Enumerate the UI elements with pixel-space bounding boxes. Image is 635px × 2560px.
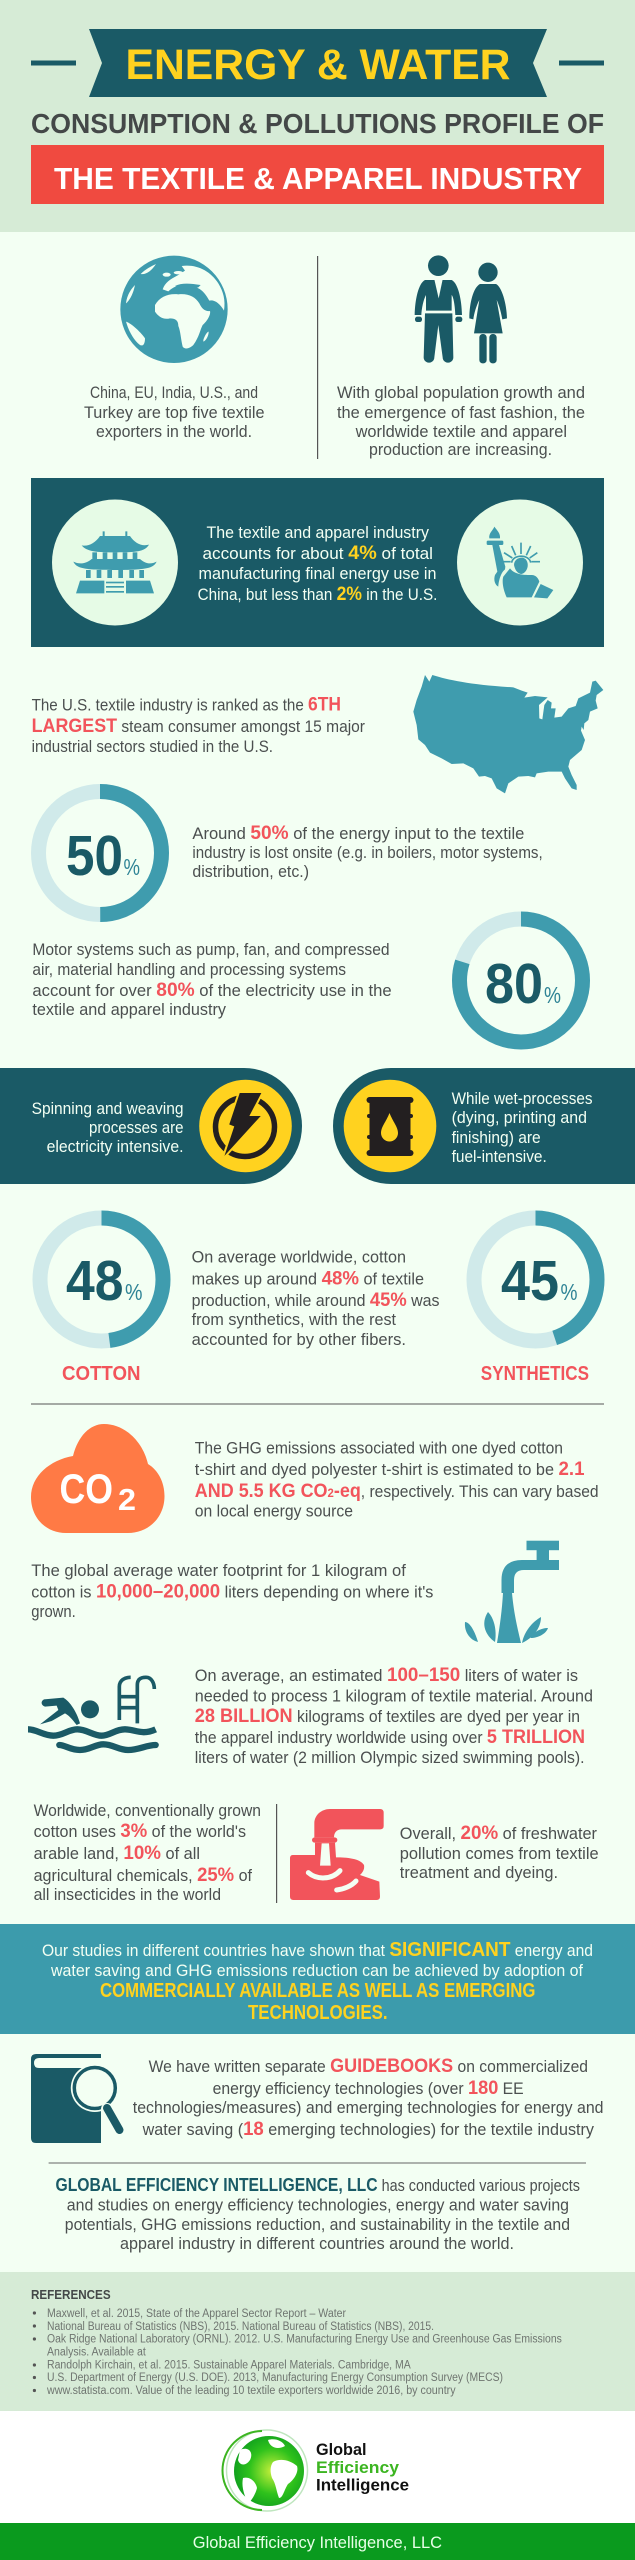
panel: 80 percent motor systems xyxy=(32,919,582,1042)
text: exporters: China, EU, India, U.S., and xyxy=(90,384,258,402)
text: 6th largest: LARGEST steam consumer amongst 15 major xyxy=(32,716,365,737)
footer xyxy=(0,2523,635,2560)
list of references: U.S. Department of Energy (U.S. DOE). 2013, Manufacturing Energy Consumption Survey (MECS) xyxy=(47,2372,503,2384)
text: wet processes: finishing) are xyxy=(452,1129,541,1147)
text: fast fashion: production are increasing. xyxy=(369,441,552,459)
text: guidebooks xyxy=(133,2056,604,2140)
icon: CO2 cloud xyxy=(31,1424,164,1533)
chart: 45% synthetics ring xyxy=(474,1218,597,1385)
text: 50%: industry is lost onsite (e.g. in boilers, motor systems, xyxy=(192,844,543,862)
heading: references: REFERENCES xyxy=(31,2287,111,2302)
icon: globe xyxy=(120,256,228,363)
text: 80%: account for over 80% of the electricity use in the xyxy=(32,980,392,1001)
text: cotton land use: agricultural chemicals, 25% of xyxy=(34,1865,252,1886)
subtitle: CONSUMPTION & POLLUTIONS PROFILE OF xyxy=(31,108,604,139)
list of references: Randolph Kirchain, et al. 2015. Sustainable Apparel Materials. Cambridge, MA xyxy=(47,2360,411,2372)
panel: top exporters xyxy=(84,255,585,459)
text: exporters xyxy=(84,384,264,441)
list of references: Oak Ridge National Laboratory (ORNL). 2012. U.S. Manufacturing Energy Use and Greenhouse Gas Emissions xyxy=(47,2334,562,2346)
panel: cotton and synthetics xyxy=(40,1218,597,1385)
text: guidebooks: We have written separate GUIDEBOOKS on commercialized xyxy=(149,2056,588,2077)
text: fiber shares xyxy=(192,1249,440,1349)
panel: China and U.S. energy share xyxy=(31,478,604,647)
text: dyeing water: 28 BILLION kilograms of textiles are dyed per year in xyxy=(195,1706,580,1727)
red title banner xyxy=(31,145,604,204)
title ribbon xyxy=(31,29,604,97)
text: 4% and 2% xyxy=(198,524,437,605)
icon: statue of liberty xyxy=(457,500,583,626)
panel: U.S. steam consumer xyxy=(32,675,603,793)
text: GHG: on local energy source xyxy=(195,1503,353,1521)
text: spinning and weaving: processes are xyxy=(89,1119,184,1137)
text: dyeing water: the apparel industry worldwide using over 5 TRILLION xyxy=(195,1727,585,1748)
text: cotton land use: Worldwide, conventionally grown xyxy=(34,1802,261,1820)
icon: CO2 cloud: 2 xyxy=(118,1482,136,1517)
panel: water footprint xyxy=(31,1541,559,1643)
text: exporters: Turkey are top five textile xyxy=(84,404,264,422)
text: company statement: GLOBAL EFFICIENCY INTELLIGENCE, LLC has conducted various projects xyxy=(56,2175,580,2195)
text: 6th largest: The U.S. textile industry is ranked as the 6TH xyxy=(32,695,341,716)
panel: savings callout: COMMERCIALLY AVAILABLE AS WELL AS EMERGING xyxy=(100,1980,535,2002)
text: guidebooks: technologies/measures) and emerging technologies for energy and xyxy=(133,2099,604,2117)
text: logo wordmark: Efficiency xyxy=(316,2459,400,2477)
text: freshwater pollution: pollution comes from textile xyxy=(400,1845,599,1863)
text: freshwater pollution xyxy=(400,1823,599,1882)
chart: 45% synthetics ring: SYNTHETICS xyxy=(481,1363,589,1385)
text: fast fashion: worldwide textile and apparel xyxy=(355,423,567,441)
text: wet processes xyxy=(452,1090,592,1166)
footer: Global Efficiency Intelligence, LLC xyxy=(193,2533,442,2552)
text: dyeing water: needed to process 1 kilogram of textile material. Around xyxy=(195,1688,593,1706)
chart: 48% cotton ring xyxy=(40,1218,163,1385)
text: water footprint: cotton is 10,000–20,000 liters depending on where it's xyxy=(31,1582,433,1603)
text: 4% and 2%: China, but less than 2% in the U.S. xyxy=(198,584,437,605)
icon: U.S. map xyxy=(413,675,603,793)
list of references: www.statista.com. Value of the leading 10 textile exporters worldwide 2016, by country xyxy=(46,2385,456,2397)
chart: 80% ring xyxy=(460,919,582,1042)
panel: savings callout xyxy=(0,1924,635,2034)
text: 50%: Around 50% of the energy input to the textile xyxy=(192,823,524,844)
text: 6th largest xyxy=(32,695,365,756)
text: company statement: and studies on energy efficiency technologies, energy and water saving xyxy=(67,2197,569,2215)
text: dyeing water xyxy=(195,1665,593,1767)
text: fiber shares: from synthetics, with the rest xyxy=(192,1311,396,1329)
chart: 80% ring: % xyxy=(544,982,561,1008)
icon: man and woman xyxy=(415,255,507,363)
panel: logo xyxy=(0,2411,635,2523)
chart: 45% synthetics ring: 45 xyxy=(501,1249,559,1313)
text: 80%: Motor systems such as pump, fan, and compressed xyxy=(32,941,390,959)
text: guidebooks: energy efficiency technologies (over 180 EE xyxy=(213,2078,524,2099)
header panel xyxy=(0,0,635,232)
text: 80%: air, material handling and processing systems xyxy=(32,961,346,979)
text: water footprint: The global average water footprint for 1 kilogram of xyxy=(31,1562,406,1580)
chart: 80% ring: 80 xyxy=(485,952,543,1016)
text: 4% and 2%: accounts for about 4% of total xyxy=(202,543,433,564)
red title banner: THE TEXTILE & APPAREL INDUSTRY xyxy=(54,162,582,196)
text: cotton land use: all insecticides in the world xyxy=(34,1886,221,1904)
icon: lightning bolt xyxy=(199,1080,292,1172)
text: company statement: apparel industry in different countries around the world. xyxy=(120,2235,514,2253)
icon: CO2 cloud: CO xyxy=(60,1465,113,1512)
text: wet processes: While wet-processes xyxy=(452,1090,592,1108)
text: fiber shares: On average worldwide, cotton xyxy=(192,1249,406,1267)
list of references xyxy=(33,2308,562,2397)
text: 6th largest: industrial sectors studied in the U.S. xyxy=(32,738,273,756)
panel: guidebooks xyxy=(31,2054,604,2143)
text: logo wordmark: Global xyxy=(316,2441,366,2459)
icon: book with magnifier xyxy=(31,2054,120,2143)
text: GHG: The GHG emissions associated with one dyed cotton xyxy=(195,1440,563,1458)
panel: savings callout: water saving and GHG emissions reduction can be achieved by adoption of xyxy=(50,1962,583,1980)
text: dyeing water: liters of water (2 million Olympic sized swimming pools). xyxy=(195,1749,585,1767)
icon: pagoda xyxy=(52,500,178,626)
chart: 48% cotton ring: % xyxy=(125,1279,142,1305)
text: spinning and weaving xyxy=(32,1100,183,1156)
text: spinning and weaving: Spinning and weaving xyxy=(32,1100,183,1118)
text: company statement: potentials, GHG emissions reduction, and sustainability in the textile and xyxy=(65,2216,570,2234)
chart: 45% synthetics ring: % xyxy=(560,1279,578,1305)
text: cotton land use xyxy=(34,1802,261,1904)
panel: electricity intensive band xyxy=(0,1068,302,1184)
chart: 50% ring: % xyxy=(124,854,140,880)
text: spinning and weaving: electricity intensive. xyxy=(47,1138,183,1156)
panel: GHG emissions xyxy=(31,1424,599,1533)
text: water footprint xyxy=(31,1562,433,1621)
text: 50%: distribution, etc.) xyxy=(192,863,309,881)
panel: savings callout: Our studies in different countries have shown that SIGNIFICANT energy and xyxy=(42,1939,593,1961)
text: fast fashion: the emergence of fast fashion, the xyxy=(337,404,585,422)
text: guidebooks: water saving (18 emerging technologies) for the textile industry xyxy=(142,2119,595,2140)
text: 80% xyxy=(32,941,392,1019)
text: cotton land use: arable land, 10% of all xyxy=(34,1843,200,1864)
text: 4% and 2%: The textile and apparel industry xyxy=(206,524,430,542)
text: 4% and 2%: manufacturing final energy use in xyxy=(198,565,436,583)
icon: polluting pipe xyxy=(290,1809,384,1900)
icon: oil barrel xyxy=(344,1080,436,1172)
panel: 50 percent energy lost xyxy=(38,792,543,914)
chart: 50% ring xyxy=(38,792,162,914)
text: logo wordmark: Intelligence xyxy=(316,2477,409,2495)
text: 50% xyxy=(192,823,543,881)
text: fiber shares: makes up around 48% of textile xyxy=(192,1268,424,1290)
text: GHG: t-shirt and dyed polyester t-shirt is estimated to be 2.1 xyxy=(195,1459,585,1480)
text: GHG: AND 5.5 KG CO2-eq, respectively. This can vary based xyxy=(195,1481,599,1502)
text: company statement xyxy=(56,2175,580,2253)
text: GHG xyxy=(195,1440,599,1521)
chart: 50% ring: 50 xyxy=(66,824,123,888)
panel: references xyxy=(0,2272,635,2411)
panel: savings callout: TECHNOLOGIES. xyxy=(248,2002,388,2024)
icon: green globe logo xyxy=(223,2430,308,2511)
text: water footprint: grown. xyxy=(31,1603,76,1621)
text: exporters: exporters in the world. xyxy=(96,423,252,441)
text: cotton land use: cotton uses 3% of the world's xyxy=(34,1821,246,1842)
text: logo wordmark xyxy=(316,2441,409,2495)
text: 80%: textile and apparel industry xyxy=(32,1001,227,1019)
icon: water tap xyxy=(465,1541,559,1643)
text: freshwater pollution: treatment and dyeing. xyxy=(400,1864,558,1882)
text: wet processes: (dying, printing and xyxy=(452,1109,587,1127)
text: freshwater pollution: Overall, 20% of freshwater xyxy=(400,1823,597,1844)
panel: water for dyeing xyxy=(28,1665,593,1767)
text: dyeing water: On average, an estimated 100–150 liters of water is xyxy=(195,1665,578,1686)
chart: 48% cotton ring: COTTON xyxy=(62,1363,140,1385)
panel: fuel intensive band xyxy=(333,1068,635,1184)
list of references: Maxwell, et al. 2015, State of the Apparel Sector Report – Water xyxy=(47,2308,346,2320)
list of references: Analysis. Available at xyxy=(47,2347,147,2359)
text: fast fashion xyxy=(337,384,585,459)
list of references: National Bureau of Statistics (NBS), 2015. National Bureau of Statistics (NBS), 2015. xyxy=(47,2321,434,2333)
text: fiber shares: production, while around 45% was xyxy=(192,1290,440,1311)
text: fiber shares: accounted for by other fibers. xyxy=(192,1331,406,1349)
text: wet processes: fuel-intensive. xyxy=(452,1148,547,1166)
chart: 48% cotton ring: 48 xyxy=(66,1249,124,1313)
text: fast fashion: With global population growth and xyxy=(337,384,585,402)
panel: cotton land and pollution xyxy=(34,1802,599,1904)
icon: swimmer xyxy=(28,1677,156,1750)
title ribbon: ENERGY & WATER xyxy=(126,41,510,89)
